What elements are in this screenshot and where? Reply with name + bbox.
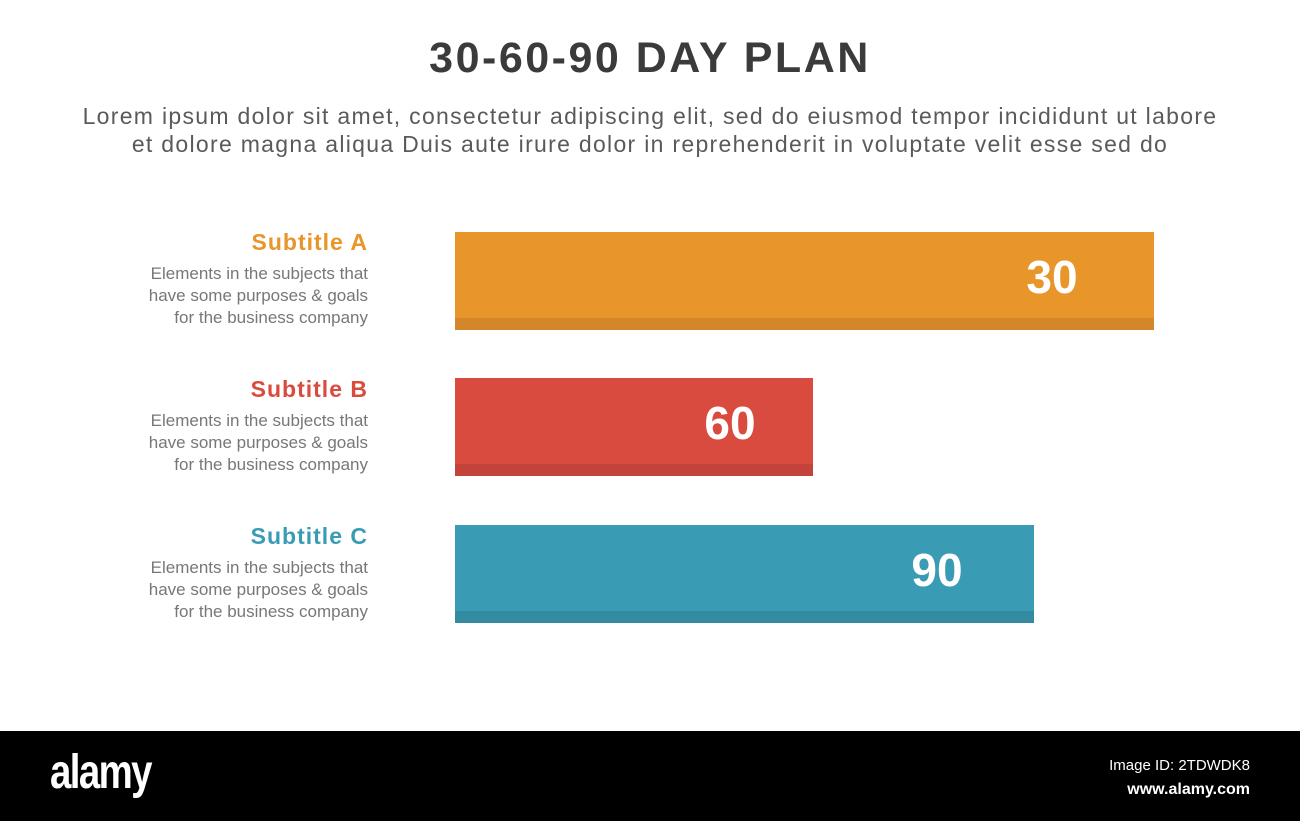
bar: 60: 60 bbox=[704, 397, 756, 449]
description text: Lorem ipsum dolor sit amet, consectetur adipiscing elit, sed do eiusmod tempor incididunt ut labore bbox=[83, 103, 1217, 129]
footer logo: alamy bbox=[50, 746, 151, 799]
footer image id: www.alamy.com bbox=[1127, 781, 1250, 798]
label: subtitle B: Elements in the subjects that bbox=[151, 411, 368, 430]
footer bbox=[0, 731, 1300, 821]
label: subtitle B: for the business company bbox=[174, 455, 368, 474]
label: subtitle B: have some purposes & goals bbox=[149, 433, 368, 452]
label: subtitle A: for the business company bbox=[174, 308, 368, 327]
label: subtitle A: Subtitle A bbox=[252, 229, 368, 255]
title: 30-60-90 DAY PLAN bbox=[429, 34, 871, 82]
label: subtitle A bbox=[149, 229, 368, 327]
label: subtitle C bbox=[149, 523, 368, 621]
label: subtitle C: for the business company bbox=[174, 602, 368, 621]
label: subtitle C: Elements in the subjects that bbox=[151, 558, 368, 577]
footer image id: Image ID: 2TDWDK8 bbox=[1109, 757, 1250, 774]
footer image id bbox=[1109, 757, 1250, 798]
bar: 30 bbox=[455, 232, 1154, 330]
bar: 90 bbox=[455, 525, 1034, 623]
description text bbox=[83, 103, 1217, 157]
label: subtitle C: have some purposes & goals bbox=[149, 580, 368, 599]
label: subtitle C: Subtitle C bbox=[251, 523, 368, 549]
label: subtitle A: Elements in the subjects that bbox=[151, 264, 368, 283]
bar: 30: 30 bbox=[1026, 251, 1078, 303]
bar: 60 bbox=[455, 378, 813, 476]
label: subtitle A: have some purposes & goals bbox=[149, 286, 368, 305]
bar: 90: 90 bbox=[911, 544, 963, 596]
description text: et dolore magna aliqua Duis aute irure dolor in reprehenderit in voluptate velit esse sed do bbox=[132, 131, 1168, 157]
label: subtitle B bbox=[149, 376, 368, 474]
label: subtitle B: Subtitle B bbox=[251, 376, 368, 402]
